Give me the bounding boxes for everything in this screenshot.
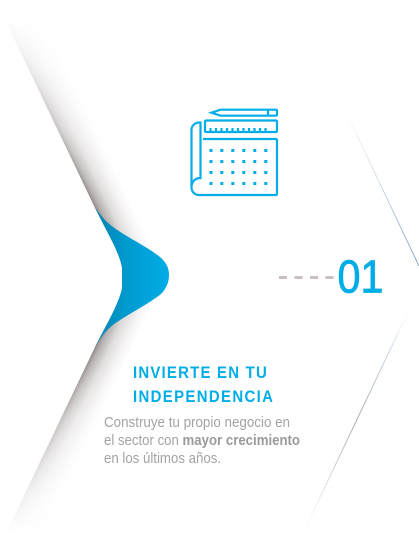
right lower edge line xyxy=(303,310,409,533)
description text: en los últimos años. xyxy=(104,451,221,467)
description text: Construye tu propio negocio en xyxy=(104,415,290,431)
dashed connector xyxy=(279,276,334,279)
pencil xyxy=(212,110,277,116)
description text: el sector con mayor crecimiento xyxy=(104,433,300,449)
heading: INDEPENDENCIA xyxy=(133,388,273,406)
step number: 01 xyxy=(338,250,384,302)
heading: INVIERTE EN TU xyxy=(133,364,267,382)
heading xyxy=(133,364,273,406)
description text xyxy=(104,415,300,467)
icon: blueprint with ruler and pencil xyxy=(192,110,277,195)
dot grid xyxy=(210,149,267,185)
ruler xyxy=(205,120,277,132)
sheet with roll xyxy=(192,122,277,195)
lower page curl shadow xyxy=(16,306,144,512)
right upper edge line xyxy=(345,110,419,266)
blue curled tab xyxy=(95,207,169,347)
upper page curl shadow xyxy=(15,40,142,244)
